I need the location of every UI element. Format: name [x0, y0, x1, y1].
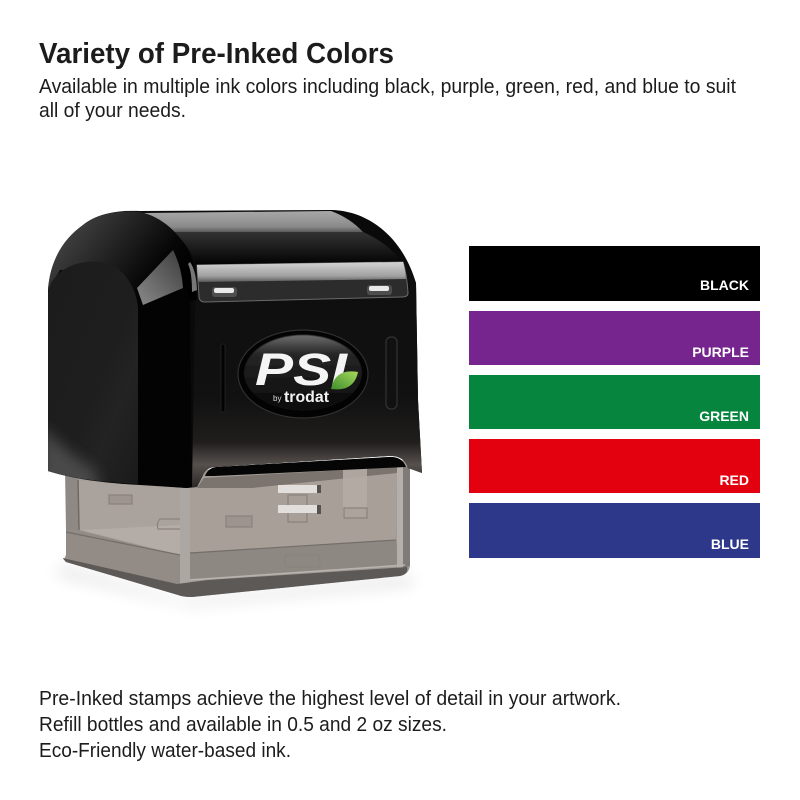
lower lip [205, 457, 406, 476]
dome shading [48, 211, 197, 307]
swatch: green: GREEN [699, 408, 749, 424]
side lower shading [48, 428, 102, 481]
footer text: Refill bottles and available in 0.5 and 2 oz sizes. [39, 714, 447, 736]
black cap body [48, 210, 422, 488]
footer text [39, 688, 621, 762]
swatch: purple: PURPLE [692, 344, 749, 360]
swatch: black [469, 246, 760, 301]
swatch: green [469, 375, 760, 429]
swatch: blue [469, 503, 760, 558]
intro text [39, 76, 736, 122]
top recess [173, 232, 402, 266]
black strip [138, 288, 192, 488]
intro text: all of your needs. [39, 100, 186, 122]
clear lid band [197, 262, 408, 302]
footer text: Eco-Friendly water-based ink. [39, 740, 291, 762]
clear base bottom edge [63, 558, 407, 597]
swatch: blue: BLUE [711, 536, 749, 552]
swatch: red [469, 439, 760, 493]
swatch: black: BLACK [700, 277, 749, 293]
leaf [331, 371, 358, 389]
PSI by trodat logo: trodat [284, 389, 330, 406]
body side panel [48, 262, 138, 484]
body slots [221, 344, 225, 412]
stamp shadow [55, 565, 415, 606]
lid tabs [212, 287, 237, 297]
PSI by trodat logo: PSI [255, 344, 349, 395]
clear base details [109, 495, 367, 567]
swatch: red: RED [719, 472, 749, 488]
footer text: Pre-Inked stamps achieve the highest level of detail in your artwork. [39, 688, 621, 710]
swatch: purple [469, 311, 760, 365]
side highlight [137, 250, 183, 305]
clear base [63, 460, 410, 597]
stamp product illustration [40, 210, 422, 606]
PSI by trodat logo [238, 330, 368, 418]
body front face [192, 262, 422, 487]
PSI by trodat logo: by [273, 394, 281, 403]
top window [143, 211, 363, 232]
color swatches [469, 246, 760, 558]
title: Variety of Pre-Inked Colors [39, 38, 394, 70]
intro text: Available in multiple ink colors including black, purple, green, red, and blue to suit [39, 76, 736, 98]
